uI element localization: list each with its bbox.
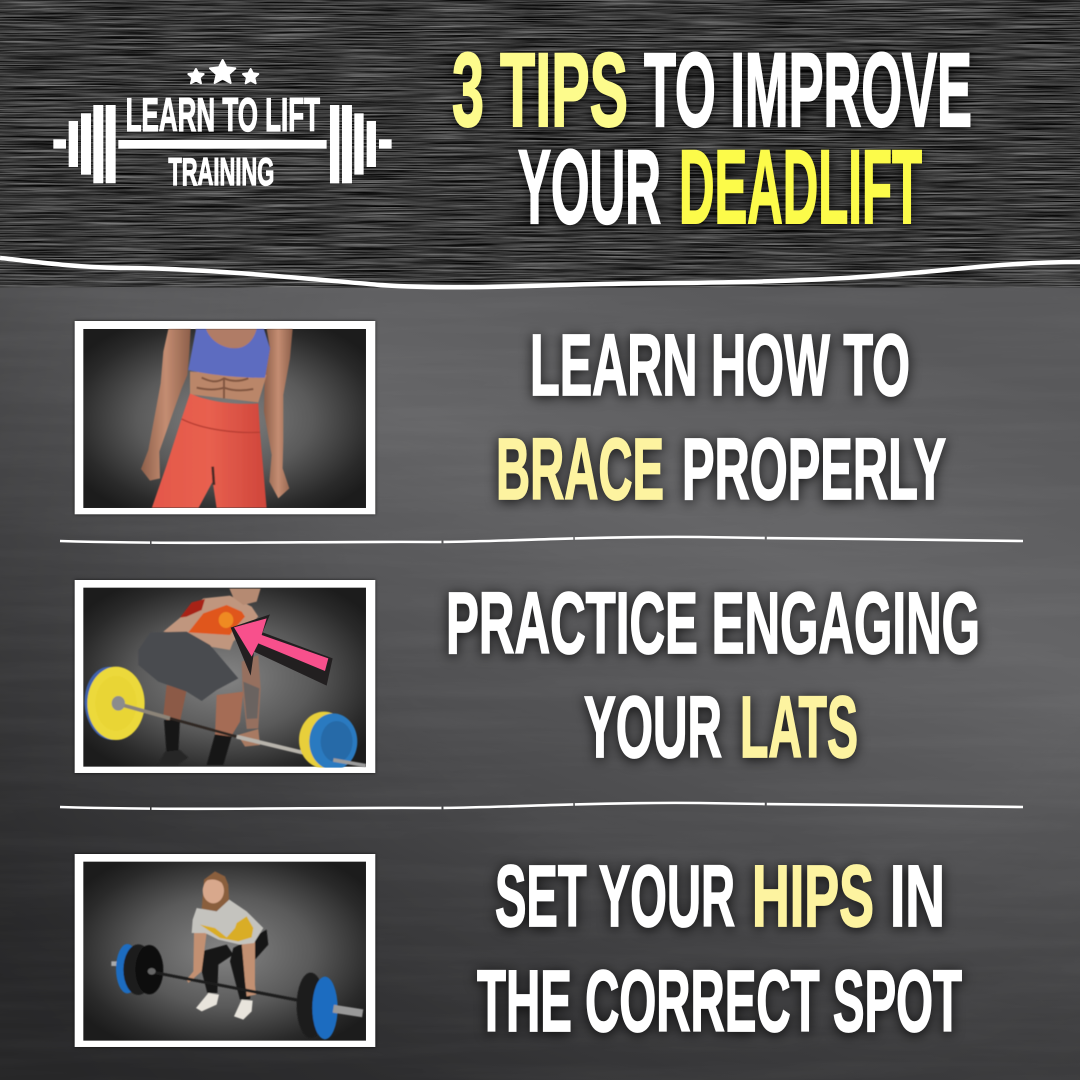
- tip 2 text: [446, 575, 980, 776]
- icon: pink arrow pointing to lats: [231, 614, 333, 686]
- tip 3 text: [477, 848, 962, 1050]
- legs: [163, 685, 187, 725]
- leggings: [152, 393, 267, 508]
- tip 2 text: LATS: [740, 679, 858, 776]
- forearm with tattoo: [242, 655, 261, 729]
- lats highlight: [188, 605, 245, 635]
- sports bra: [188, 329, 270, 378]
- shoes: [196, 993, 219, 1011]
- photo panel 1: braced torso: [75, 321, 375, 514]
- logo wordmark: learn to lift: LEARN TO LIFT: [126, 89, 320, 142]
- abs: [190, 372, 267, 402]
- arm left: [141, 329, 191, 481]
- head: [229, 588, 261, 605]
- front plates: [298, 710, 334, 768]
- back: [163, 596, 258, 650]
- logo wordmark: training: TRAINING: [168, 150, 274, 194]
- title: 3 TIPS: [452, 32, 628, 149]
- photo panel 2: deadlift setup with lats highlighted and arrow: [75, 580, 375, 773]
- header band: dark wood texture with torn white edge: [0, 0, 1080, 287]
- socks and shoes: [164, 720, 180, 755]
- tip 3 text: SET YOUR: [495, 848, 735, 945]
- tip 1 text: BRACE: [496, 421, 664, 518]
- right plates: [297, 973, 325, 1038]
- icon: three stars: [188, 60, 258, 83]
- shorts: [138, 632, 238, 701]
- chest: [195, 329, 260, 348]
- tip 1 text: [496, 317, 946, 518]
- barbell: [120, 704, 170, 718]
- legs: [200, 945, 233, 993]
- title: YOUR: [518, 129, 661, 246]
- arms: [187, 933, 207, 983]
- arm right: [264, 329, 293, 498]
- rear yellow plate: [84, 666, 114, 741]
- shirt: [192, 900, 263, 945]
- logo: Learn to Lift Training barbell: [53, 60, 392, 194]
- hair behind: [202, 871, 229, 911]
- tip 3 text: IN: [890, 848, 945, 945]
- hair top: [204, 874, 227, 891]
- face: [203, 878, 224, 903]
- photo panel 3: woman in deadlift setup: [75, 854, 375, 1047]
- left plates: [111, 961, 121, 966]
- tip 2 text: YOUR: [584, 679, 722, 776]
- title: [452, 32, 972, 246]
- barbell: [148, 971, 300, 1001]
- tip 3 text: HIPS: [752, 848, 874, 945]
- icon: barbell plates and bar: [53, 105, 392, 183]
